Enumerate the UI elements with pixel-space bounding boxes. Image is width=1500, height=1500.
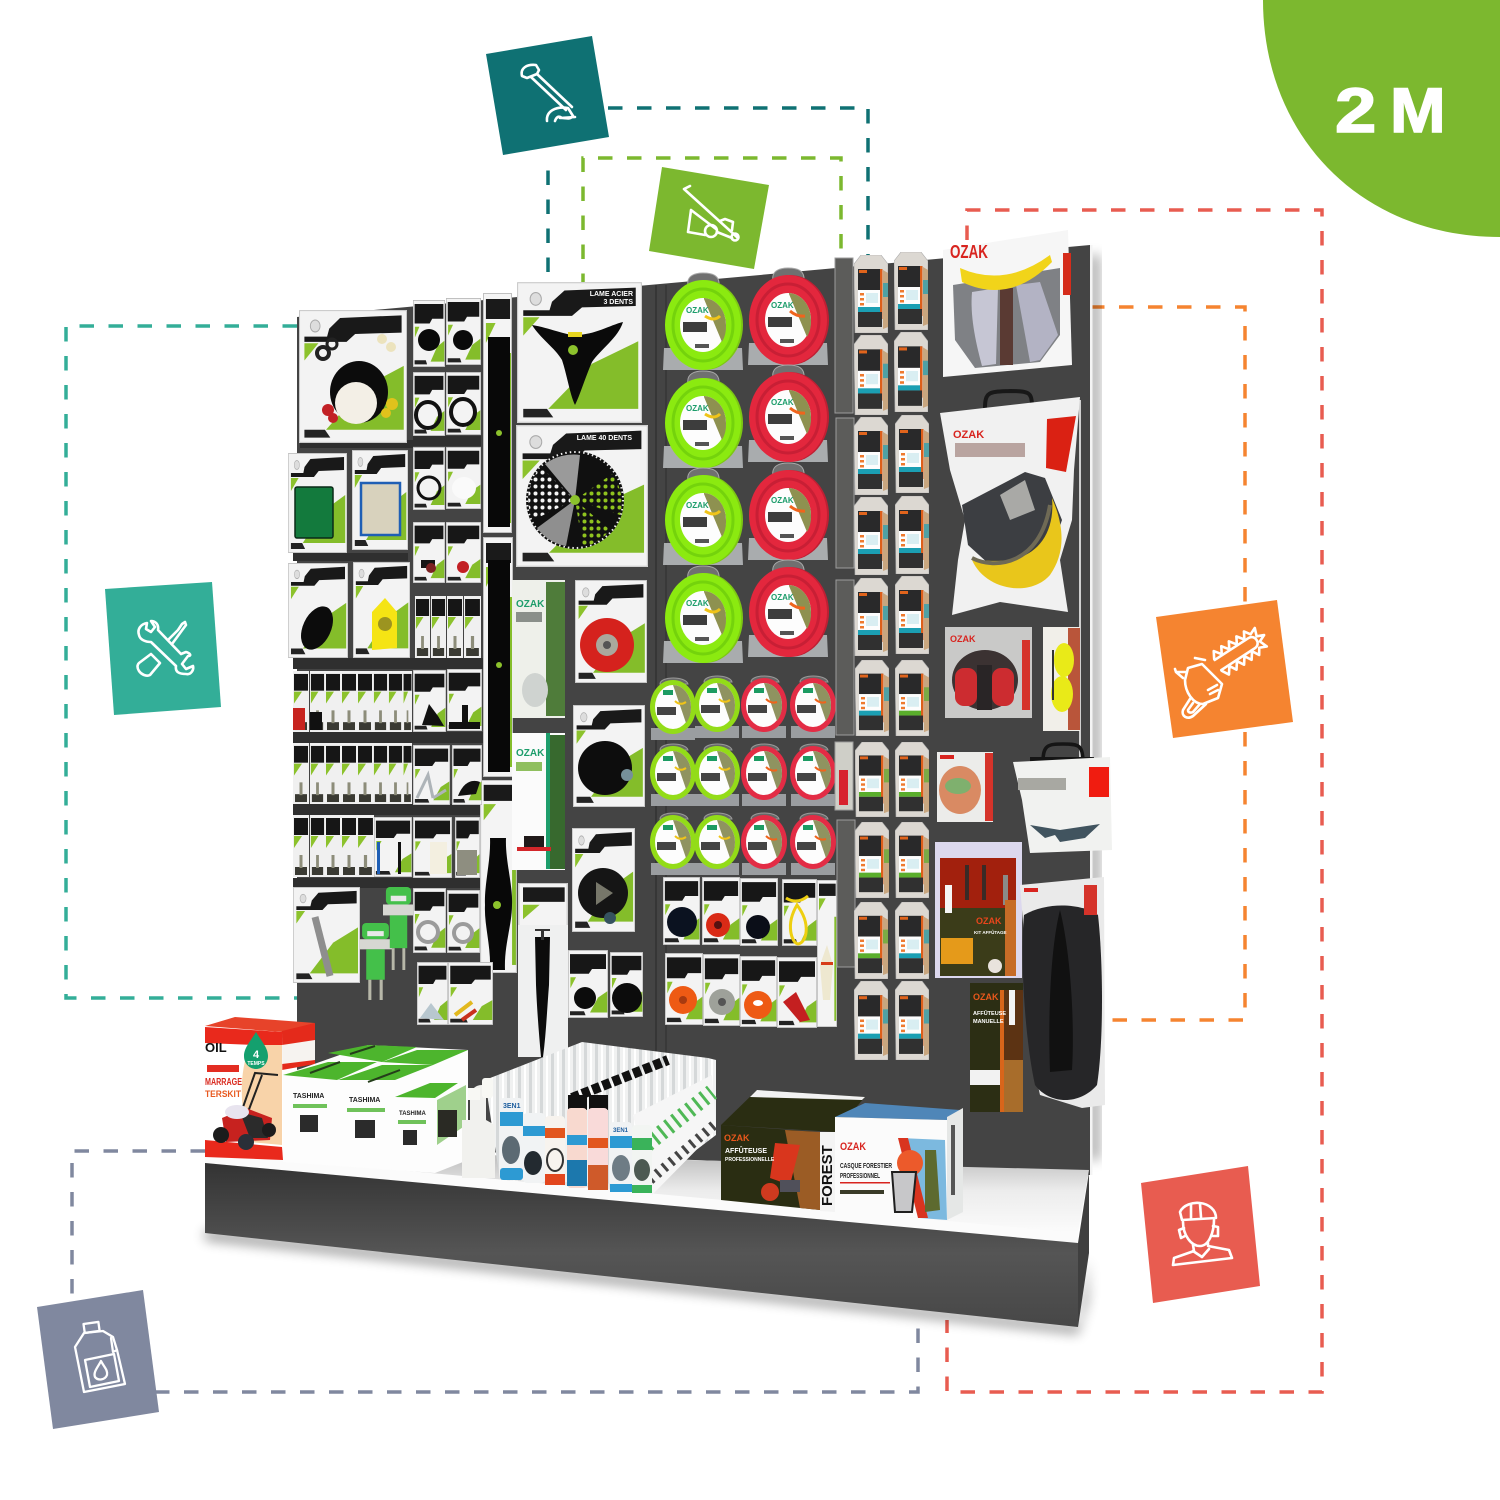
helmet box: Casque forestier — [835, 1103, 963, 1220]
plinth side — [1078, 1172, 1089, 1327]
pack: mowing head kit — [299, 310, 407, 443]
earmuffs pack: OZAK — [950, 634, 976, 644]
tile: oil jug icon — [37, 1290, 159, 1429]
battery boxes: TASHIMA — [399, 1111, 427, 1117]
dashed frame: protection (red) — [947, 210, 1322, 1392]
aerosol cans: 3EN1 — [503, 1103, 521, 1110]
sharpener box: Forest: PROFESSIONNELLE — [725, 1157, 775, 1163]
spare head packs — [663, 877, 837, 1028]
packs beside narrow rows — [413, 669, 482, 878]
glove bag — [1020, 877, 1105, 1108]
peg shelves bars — [293, 436, 483, 888]
forest sharpener pack — [970, 983, 1023, 1112]
blade pack: 3 teeth: LAME ACIER — [590, 291, 633, 298]
aerosol cans — [500, 1095, 652, 1193]
blade pack: 3 teeth — [517, 282, 642, 423]
battery boxes — [283, 1045, 468, 1173]
pack: file sharpener — [293, 887, 360, 983]
tile: strimmer icon — [486, 36, 609, 155]
chain file long packs — [835, 258, 855, 967]
helmet visor bag — [940, 391, 1080, 615]
corner badge: 2 M: M — [1390, 75, 1446, 146]
red starter kit box: OIL — [205, 1040, 227, 1055]
blade pack: 40 teeth saw disc: LAME 40 DENTS — [577, 435, 632, 442]
tile: mower icon — [649, 167, 769, 269]
red spools: OZAK — [771, 496, 794, 505]
filter packs — [288, 450, 410, 658]
green spools: OZAK — [686, 306, 709, 315]
red starter kit box: 4 — [253, 1049, 260, 1061]
glasses bag — [1013, 744, 1112, 853]
narrow pack rows — [293, 671, 412, 877]
sharpener box: Forest — [721, 1090, 865, 1212]
earmuffs pack — [945, 627, 1032, 718]
aerosol cans: 3EN1 — [613, 1128, 629, 1134]
corner badge: 2 M — [1263, 0, 1500, 237]
tile: tools icon — [105, 582, 221, 715]
long blade packs — [480, 293, 517, 973]
face shield pack: OZAK — [950, 242, 988, 262]
sharpening kit: KIT AFFÛTAGE — [974, 929, 1006, 935]
lower small packs — [413, 888, 493, 1025]
red spools — [748, 268, 829, 657]
OZAK inserts: OZAK — [516, 748, 545, 759]
dashed frame: tools (green teal) — [66, 326, 297, 998]
cap pack — [937, 752, 993, 822]
wall shadow — [1090, 255, 1099, 1160]
dashed frame: strimmers (dark teal) — [548, 108, 868, 272]
corner badge: 2 M: 2 — [1335, 75, 1376, 146]
display stand — [205, 245, 1099, 1334]
blade pack: 3 teeth: 3 DENTS — [603, 299, 633, 306]
round head packs — [568, 580, 647, 1018]
tile: chainsaw icon — [1156, 600, 1293, 738]
large trimmer line spools — [663, 268, 829, 663]
green spools: OZAK — [686, 501, 709, 510]
small packs column — [413, 298, 481, 658]
sharpener box: Forest: AFFÛTEUSE — [725, 1146, 767, 1155]
chainsaw chain packs — [854, 252, 929, 1060]
red starter kit box: TEMPS — [247, 1061, 265, 1067]
dashed frame: oils (slate) — [72, 1151, 918, 1392]
battery boxes: TASHIMA — [293, 1093, 324, 1100]
icon row: green gauges — [359, 887, 414, 1000]
helmet box: Casque forestier: PROFESSIONNEL — [840, 1173, 880, 1180]
blade pack: 40 teeth saw disc — [516, 425, 648, 567]
back wall — [297, 245, 1090, 1175]
sharpener box: Forest: FOREST — [819, 1145, 836, 1206]
clear bottle rows — [462, 1042, 716, 1195]
dashed frame: chainsaw (orange) — [1090, 307, 1245, 1020]
red starter kit box — [205, 1017, 315, 1160]
forest sharpener pack: AFFÛTEUSE — [973, 1010, 1006, 1017]
glasses pack — [1043, 627, 1080, 731]
forest sharpener pack: MANUELLE — [973, 1019, 1004, 1025]
left accessories: large and small packs — [288, 282, 648, 1057]
sharpener box: Forest: OZAK — [724, 1133, 750, 1143]
green spools: OZAK — [686, 599, 709, 608]
tile: protection worker icon — [1141, 1166, 1260, 1303]
sharpening kit — [935, 842, 1022, 978]
sharpening kit: OZAK — [976, 916, 1002, 926]
red starter kit box: MARRAGE — [205, 1077, 242, 1088]
shelf top — [205, 1148, 1089, 1243]
helmet box: Casque forestier: OZAK — [840, 1141, 866, 1153]
OZAK inserts — [512, 580, 565, 870]
red spools: OZAK — [771, 398, 794, 407]
face shield pack — [943, 230, 1072, 377]
pump pack — [518, 883, 568, 1057]
green spools — [663, 273, 743, 663]
OZAK inserts: OZAK — [516, 599, 545, 610]
red spools: OZAK — [771, 593, 794, 602]
helmet box: Casque forestier: CASQUE FORESTIER — [840, 1161, 892, 1170]
red starter kit box: TERSKIT — [205, 1089, 241, 1099]
battery boxes: TASHIMA — [349, 1097, 380, 1104]
plinth front — [205, 1163, 1078, 1327]
green spools: OZAK — [686, 404, 709, 413]
small trimmer line spools — [650, 676, 836, 875]
helmet visor bag: OZAK — [953, 429, 984, 441]
plinth shadow — [205, 1230, 1088, 1334]
dashed frame: mowers (lime) — [583, 158, 841, 288]
forest sharpener pack: OZAK — [973, 992, 999, 1002]
red spools: OZAK — [771, 301, 794, 310]
